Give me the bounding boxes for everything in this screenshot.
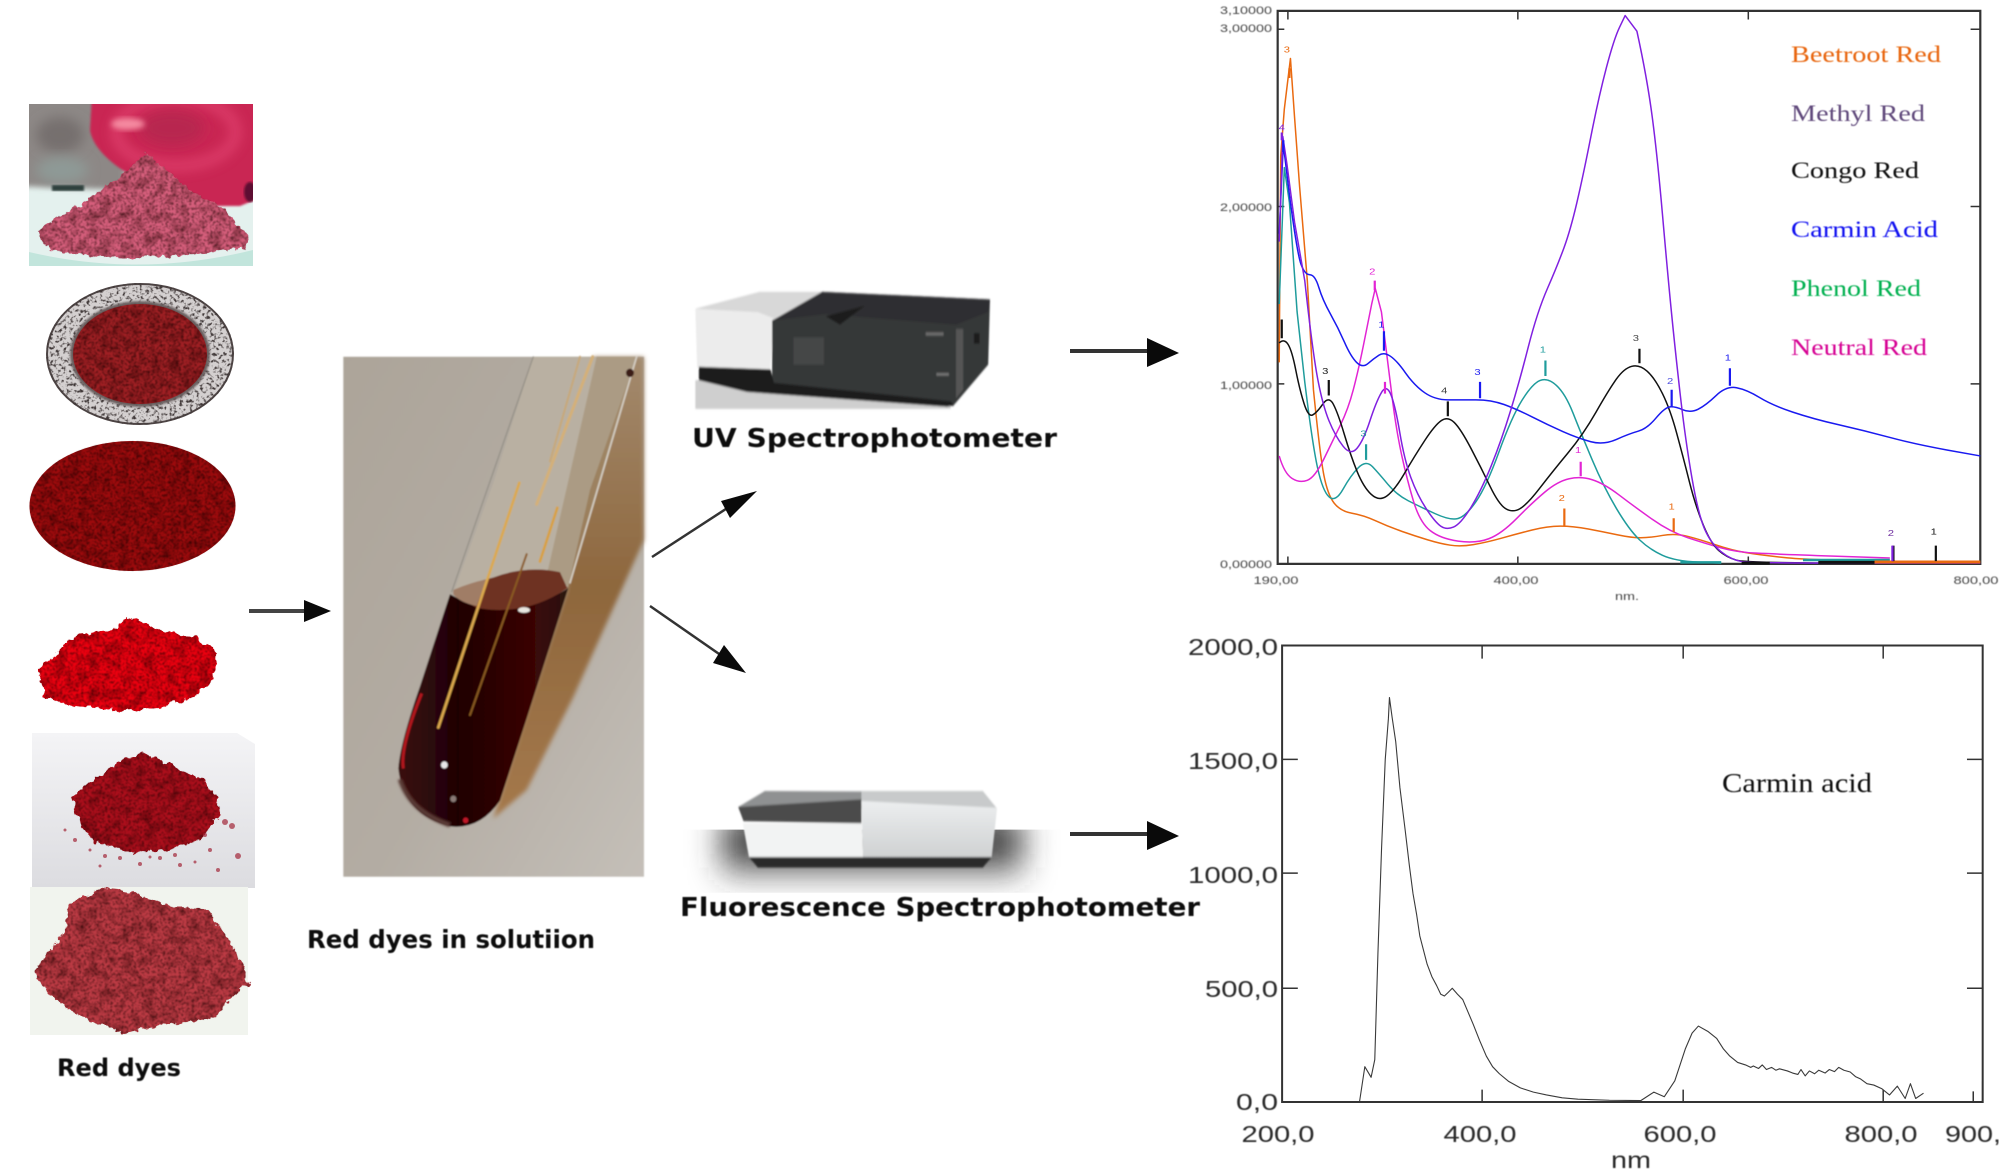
y-axis labels: 3,00000 (1220, 23, 1272, 35)
peak marker numerals: 3 (1474, 368, 1481, 377)
peak marker numerals: 1 (1725, 354, 1731, 363)
baseline colored band (1742, 562, 1980, 563)
legend: dye names: Beetroot Red (1791, 42, 1942, 67)
photo: rose red powder mound (30, 887, 248, 1035)
arrow: fluorescence instrument to emission chart (1070, 821, 1179, 850)
baseline overlap band (1680, 560, 1890, 562)
arrow: UV instrument to absorbance chart (1070, 338, 1179, 367)
heading: Fluorescence Spectrophotometer: Fluorescence Spectrophotometer (680, 893, 1200, 923)
y-axis labels (1220, 5, 1272, 571)
peak marker numerals: 1 (1378, 320, 1385, 330)
peak marker numerals: 2 (1369, 268, 1376, 277)
chart frame and ticks (1278, 11, 1980, 564)
x-axis labels: nm. (1615, 591, 1639, 603)
curve: congo red (1279, 341, 1980, 563)
y-axis labels: 0,00000 (1220, 559, 1272, 571)
x-axis labels: 400,00 (1494, 575, 1538, 587)
curve: methyl red (1279, 16, 1980, 563)
legend: dye names: Congo Red (1791, 158, 1920, 183)
y-axis labels: 0,0 (1236, 1089, 1278, 1115)
y-axis labels: 500,0 (1205, 976, 1278, 1002)
peak marker numerals: 3 (1322, 367, 1329, 377)
y-axis labels (1188, 634, 1278, 1115)
chart frame and ticks (1282, 646, 1983, 1102)
legend: dye names: Neutral Red (1791, 335, 1928, 360)
heading: Red dyes in solution: Red dyes in solutiion (307, 925, 595, 954)
arrow: powders to solution (249, 600, 331, 622)
peak marker numerals: 2 (1667, 377, 1674, 386)
peak marker numerals: 2 (1888, 529, 1894, 538)
x-axis labels: 900, (1945, 1121, 1999, 1147)
peak marker numerals: 3 (1284, 46, 1290, 55)
x-axis labels: 600,0 (1644, 1121, 1716, 1147)
arrow: solution to fluorescence spectrophotometer (650, 606, 746, 673)
peak marker numerals: 1 (1540, 346, 1547, 355)
chart: UV absorbance spectra (1220, 5, 1998, 603)
photo: bright red powder pile (38, 618, 218, 710)
y-axis labels: 2,00000 (1220, 202, 1272, 214)
heading: Red dyes: Red dyes (57, 1054, 181, 1082)
photo: dark red powder disc (30, 441, 236, 571)
peak marker numerals: 3 (1633, 334, 1640, 344)
curve: phenol red (1279, 168, 1721, 563)
peak marker numerals: 3 (1360, 430, 1367, 439)
y-axis labels: 2000,0 (1188, 634, 1278, 660)
y-axis labels: 1500,0 (1188, 748, 1278, 774)
curve: beetroot red (1279, 58, 1980, 562)
photo: UV spectrophotometer (695, 292, 990, 409)
x-axis labels: 200,0 (1242, 1121, 1314, 1147)
spectrum curve (1360, 697, 1924, 1101)
x-axis labels: 800,00 (1954, 575, 1998, 587)
arrow: solution to UV spectrophotometer (652, 491, 757, 557)
x-axis labels: 190,00 (1254, 575, 1298, 587)
legend: dye names: Phenol Red (1791, 276, 1922, 301)
peak marker numerals (1279, 46, 1937, 538)
x-axis labels (1254, 575, 1998, 603)
x-axis labels (1242, 1121, 1999, 1172)
peak marker numerals: 4 (1441, 387, 1448, 396)
heading: UV Spectrophotometer: UV Spectrophotometer (692, 424, 1057, 454)
curve: carmin acid (1279, 144, 1980, 456)
spectral curves (1279, 16, 1980, 563)
panel: red dye powders (15, 90, 262, 1035)
y-axis labels: 3,10000 (1220, 5, 1272, 17)
y-axis labels: 1,00000 (1220, 380, 1272, 392)
photo: powder on ornate plate (47, 284, 233, 424)
y-axis labels: 1000,0 (1188, 862, 1278, 888)
legend: dye names: Methyl Red (1791, 101, 1926, 126)
legend: dye names: Carmin Acid (1791, 217, 1939, 242)
legend: dye names (1791, 42, 1942, 360)
x-axis labels: 400,0 (1444, 1121, 1516, 1147)
peak marker numerals: 2 (1559, 494, 1565, 503)
peak marker numerals: 4 (1279, 124, 1285, 133)
chart annotation: Carmin acid: Carmin acid (1722, 768, 1873, 798)
peak marker numerals: 1 (1575, 446, 1582, 455)
photo: fluorescence spectrophotometer (722, 791, 1022, 868)
curve: neutral red (1279, 288, 1890, 558)
photo: crimson powder on white (32, 733, 255, 888)
chart: carmin acid fluorescence spectrum (1188, 634, 1999, 1172)
photo: test tube with red dye solution (343, 357, 644, 877)
peak marker numerals: 1 (1931, 528, 1937, 537)
peak markers (1282, 68, 1936, 561)
x-axis labels: 600,00 (1724, 575, 1768, 587)
peak marker numerals: 1 (1669, 503, 1675, 512)
photo: beetroot powder (29, 104, 253, 266)
x-axis labels: 800,0 (1844, 1121, 1918, 1147)
